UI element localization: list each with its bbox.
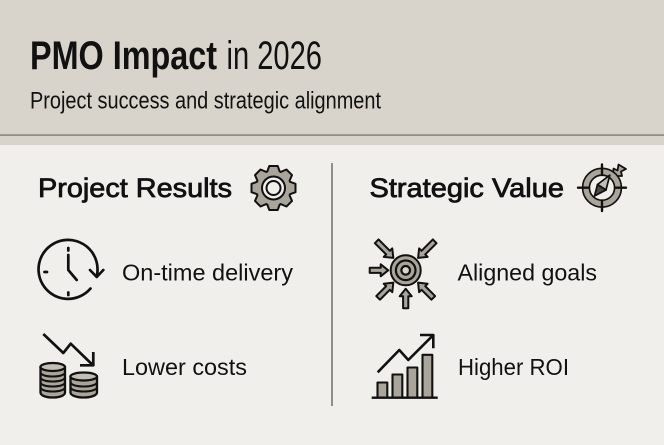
label: on-time delivery: On-time delivery [122,260,293,286]
icon: gear [252,166,296,210]
panel: strategic value [370,164,626,398]
left coin stack [40,363,65,398]
subtitle: Project success and strategic alignment [30,88,381,114]
title: in 2026 [226,34,322,78]
panel: project results [38,166,296,398]
icon: falling coins [40,334,97,398]
heading: strategic value: Strategic Value [370,173,564,203]
icon: aligned target [370,237,439,308]
heading: project results: Project Results [38,173,232,203]
icon: rising bar chart [372,335,438,398]
icon: clock with arrow [39,240,103,299]
arrows pointing inward [370,237,439,308]
header band [0,0,664,145]
label: higher roi: Higher ROI [458,354,569,380]
label: aligned goals: Aligned goals [458,260,597,286]
title: PMO Impact [30,34,217,78]
label: lower costs: Lower costs [122,354,247,380]
icon: compass target [578,164,626,211]
right coin stack [70,372,97,398]
